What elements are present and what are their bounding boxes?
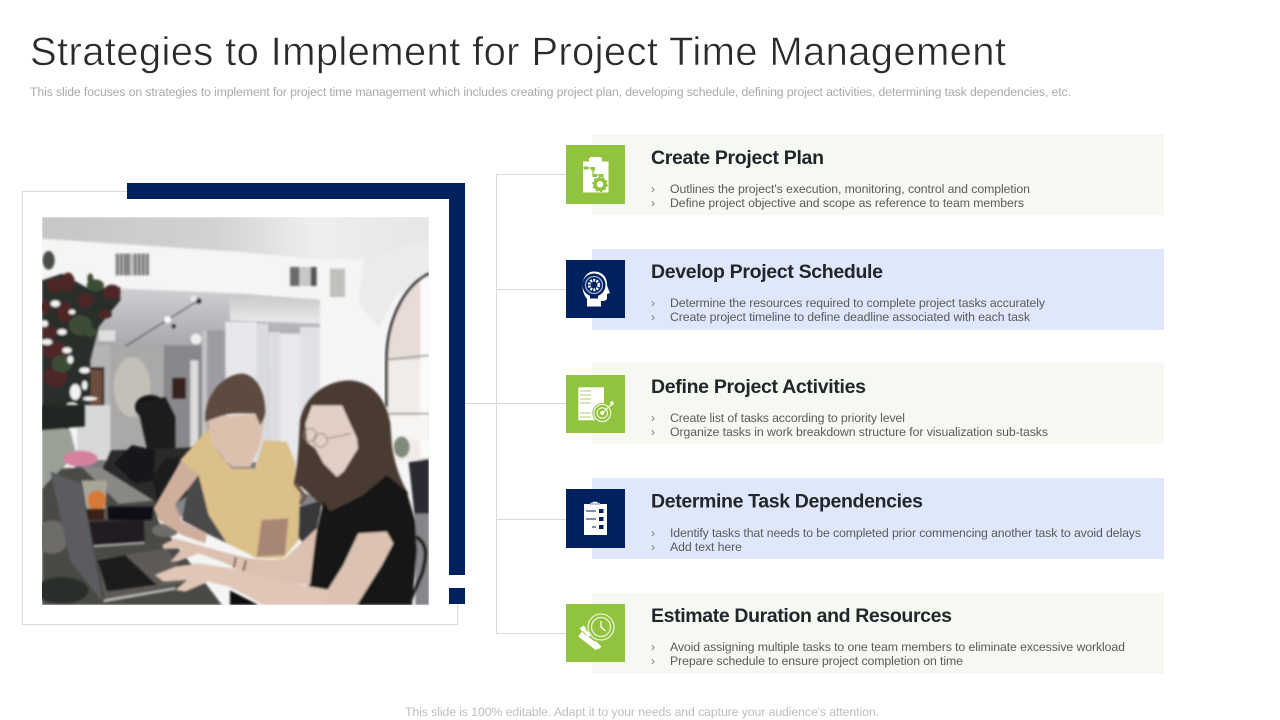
panel background bbox=[592, 134, 1164, 215]
photo: two women working at a laptop bbox=[35, 217, 430, 605]
bullet list: Create project timeline to define deadline associated with each task bbox=[670, 310, 1031, 324]
bullet list: › bbox=[651, 310, 655, 324]
bullet list: Outlines the project's execution, monitoring, control and completion bbox=[670, 182, 1030, 196]
background plant and chairs bbox=[42, 394, 194, 506]
bullet list: › bbox=[651, 640, 655, 654]
bullet list: › bbox=[651, 425, 655, 439]
panel background bbox=[592, 478, 1164, 559]
panel: define project activities bbox=[566, 363, 1164, 444]
bullet list: Identify tasks that needs to be completed prior commencing another task to avoid delays bbox=[670, 526, 1141, 540]
bullet list: Add text here bbox=[670, 540, 742, 554]
table bbox=[35, 467, 222, 605]
heading: Define Project Activities bbox=[651, 376, 866, 398]
icon: document with target bbox=[566, 375, 625, 433]
top hand and forearm bbox=[162, 528, 317, 585]
panel background bbox=[592, 249, 1164, 330]
plant and flowers bbox=[41, 251, 121, 430]
icon: clock and tools bbox=[566, 604, 625, 662]
panel: estimate duration and resources bbox=[566, 593, 1164, 674]
panel: develop project schedule bbox=[566, 249, 1164, 330]
icon: clipboard with flow chart and gear bbox=[566, 145, 625, 204]
bullet list: › bbox=[651, 654, 655, 668]
icon: checklist clipboard bbox=[566, 489, 625, 548]
connector lines bbox=[465, 174, 566, 634]
bullet list bbox=[651, 182, 1030, 210]
bullet list: Create list of tasks according to priority level bbox=[670, 411, 905, 425]
bullet list bbox=[651, 296, 1046, 324]
panel background bbox=[592, 363, 1164, 444]
navy corner accent bbox=[127, 183, 465, 604]
panel background bbox=[592, 593, 1164, 674]
bullet list bbox=[651, 526, 1141, 554]
icon: head with gear bbox=[566, 260, 625, 318]
heading: Create Project Plan bbox=[651, 147, 824, 169]
bullet list: › bbox=[651, 540, 655, 554]
panel: determine task dependencies bbox=[566, 478, 1164, 559]
glass, phone and tablet bbox=[81, 480, 154, 547]
woman in black shirt bbox=[155, 380, 426, 605]
bullet list: Prepare schedule to ensure project completion on time bbox=[670, 654, 963, 668]
footer note: This slide is 100% editable. Adapt it to your needs and capture your audience's attention. bbox=[405, 705, 879, 719]
bullet list: › bbox=[651, 196, 655, 210]
bullet list: › bbox=[651, 411, 655, 425]
bullet list: › bbox=[651, 296, 655, 310]
lower hand and forearm bbox=[155, 563, 330, 605]
photo frame outline bbox=[22, 192, 458, 624]
arched window bbox=[387, 274, 430, 605]
heading: Develop Project Schedule bbox=[651, 261, 883, 283]
subtitle: This slide focuses on strategies to implement for project time management which includes creating project plan, developing schedule, defining project activities, determining task dependencies, etc. bbox=[30, 85, 1071, 99]
laptop bbox=[50, 472, 189, 602]
bullet list: › bbox=[651, 526, 655, 540]
title: Strategies to Implement for Project Time Management bbox=[30, 30, 1006, 74]
woman in yellow shirt bbox=[154, 374, 300, 558]
bullet list: › bbox=[651, 182, 655, 196]
bullet list: Avoid assigning multiple tasks to one team members to eliminate excessive workload bbox=[670, 640, 1125, 654]
bullet list: Define project objective and scope as reference to team members bbox=[670, 196, 1024, 210]
heading: Determine Task Dependencies bbox=[651, 490, 923, 512]
air vents bbox=[115, 254, 345, 297]
bullet list: Determine the resources required to complete project tasks accurately bbox=[670, 296, 1046, 310]
bullet list bbox=[651, 411, 1048, 439]
panel: create project plan bbox=[566, 134, 1164, 215]
heading: Estimate Duration and Resources bbox=[651, 605, 952, 627]
bullet list bbox=[651, 640, 1125, 668]
bullet list: Organize tasks in work breakdown structure for visualization sub-tasks bbox=[670, 425, 1048, 439]
